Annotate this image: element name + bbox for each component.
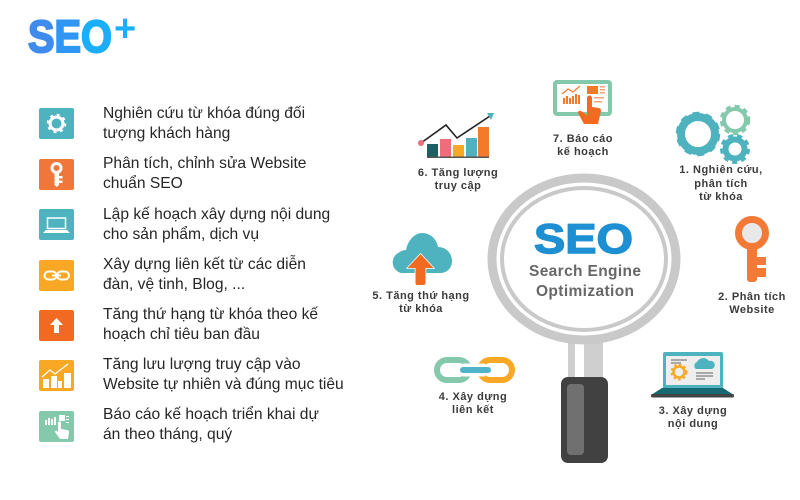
- icon: tablet and hand: [555, 82, 610, 124]
- lens text: Optimization: [536, 283, 634, 300]
- handle: [561, 377, 608, 463]
- text: row 2: Phân tích, chỉnh sửa Website: [103, 155, 306, 172]
- lens text: Search Engine: [529, 263, 641, 280]
- lens rings: [492, 178, 676, 340]
- text: row 2: chuẩn SEO: [103, 174, 183, 192]
- text: row 5: hoạch chỉ tiêu ban đầu: [103, 326, 260, 343]
- lens text: SEO: [534, 215, 633, 262]
- text: row 7: án theo tháng, quý: [103, 426, 232, 443]
- icon: laptop: [39, 209, 74, 240]
- icon: gears: [678, 106, 748, 162]
- logo: SEO+: +: [114, 8, 136, 50]
- label: step 4: 4. Xây dựng: [439, 391, 507, 403]
- text: row 1: Nghiên cứu từ khóa đúng đối: [103, 105, 305, 122]
- row 4: link building: [39, 254, 306, 293]
- icon: report hand: [39, 411, 74, 442]
- label: step 2: 2. Phân tích: [718, 291, 786, 303]
- step 1: research: [678, 106, 763, 203]
- text: row 6: Tăng lưu lượng truy cập vào: [103, 356, 301, 373]
- row 6: traffic: [39, 356, 344, 393]
- handle neck: [568, 340, 603, 378]
- text: row 4: Xây dựng liên kết từ các diễn: [103, 254, 306, 273]
- label: step 1: từ khóa: [699, 191, 743, 203]
- text: row 4: đàn, vệ tinh, Blog, ...: [103, 276, 245, 293]
- icon: chain: [437, 360, 512, 380]
- icon: laptop: [651, 352, 734, 398]
- step 3: content: [651, 352, 734, 430]
- text: row 5: Tăng thứ hạng từ khóa theo kế: [103, 306, 318, 323]
- label: step 3: nội dung: [668, 418, 718, 430]
- row 5: keyword ranking: [39, 306, 318, 343]
- label: step 5: 5. Tăng thứ hạng: [372, 290, 470, 302]
- text: row 3: Lập kế hoạch xây dựng nội dung: [103, 206, 330, 223]
- icon: key: [39, 159, 74, 190]
- icon: orange key: [738, 220, 766, 282]
- text: row 3: cho sản phẩm, dịch vụ: [103, 225, 259, 243]
- text: row 6: Website tự nhiên và đúng mục tiêu: [103, 376, 344, 393]
- row 1: keyword research: [39, 105, 305, 142]
- step 6: traffic: [418, 113, 498, 192]
- step 5: ranking: [372, 233, 470, 315]
- list: SEO task rows: [39, 105, 344, 443]
- label: step 3: 3. Xây dựng: [659, 405, 727, 417]
- icon: up arrow: [39, 310, 74, 341]
- text: row 7: Báo cáo kế hoạch triển khai dự: [103, 405, 319, 423]
- step 7: report: [553, 82, 613, 158]
- label: step 6: truy cập: [435, 180, 481, 192]
- text: row 1: tượng khách hàng: [103, 125, 230, 142]
- label: step 1: 1. Nghiên cứu,: [679, 164, 763, 176]
- label: step 7: kế hoạch: [557, 146, 609, 158]
- icon: cloud with arrow: [393, 233, 452, 285]
- label: step 2: Website: [729, 304, 775, 316]
- label: step 1: phân tích: [694, 178, 748, 190]
- icon: gear: [39, 108, 74, 139]
- lens text: [529, 215, 641, 300]
- icon: bar chart with trend arrow: [418, 113, 494, 158]
- step 4: links: [437, 360, 512, 416]
- icon: growth chart: [39, 360, 74, 391]
- icon: chain link: [39, 260, 74, 291]
- label: step 5: từ khóa: [399, 303, 443, 315]
- logo: SEO+: SEO: [28, 11, 112, 62]
- step 2: website analysis: [718, 220, 786, 316]
- magnifying glass: [492, 178, 676, 463]
- label: step 7: 7. Báo cáo: [553, 133, 613, 145]
- label: step 6: 6. Tăng lượng: [418, 167, 498, 179]
- row 2: website audit: [39, 155, 306, 192]
- label: step 4: liên kết: [452, 404, 494, 416]
- row 3: content planning: [39, 206, 330, 243]
- row 7: reporting: [39, 405, 319, 443]
